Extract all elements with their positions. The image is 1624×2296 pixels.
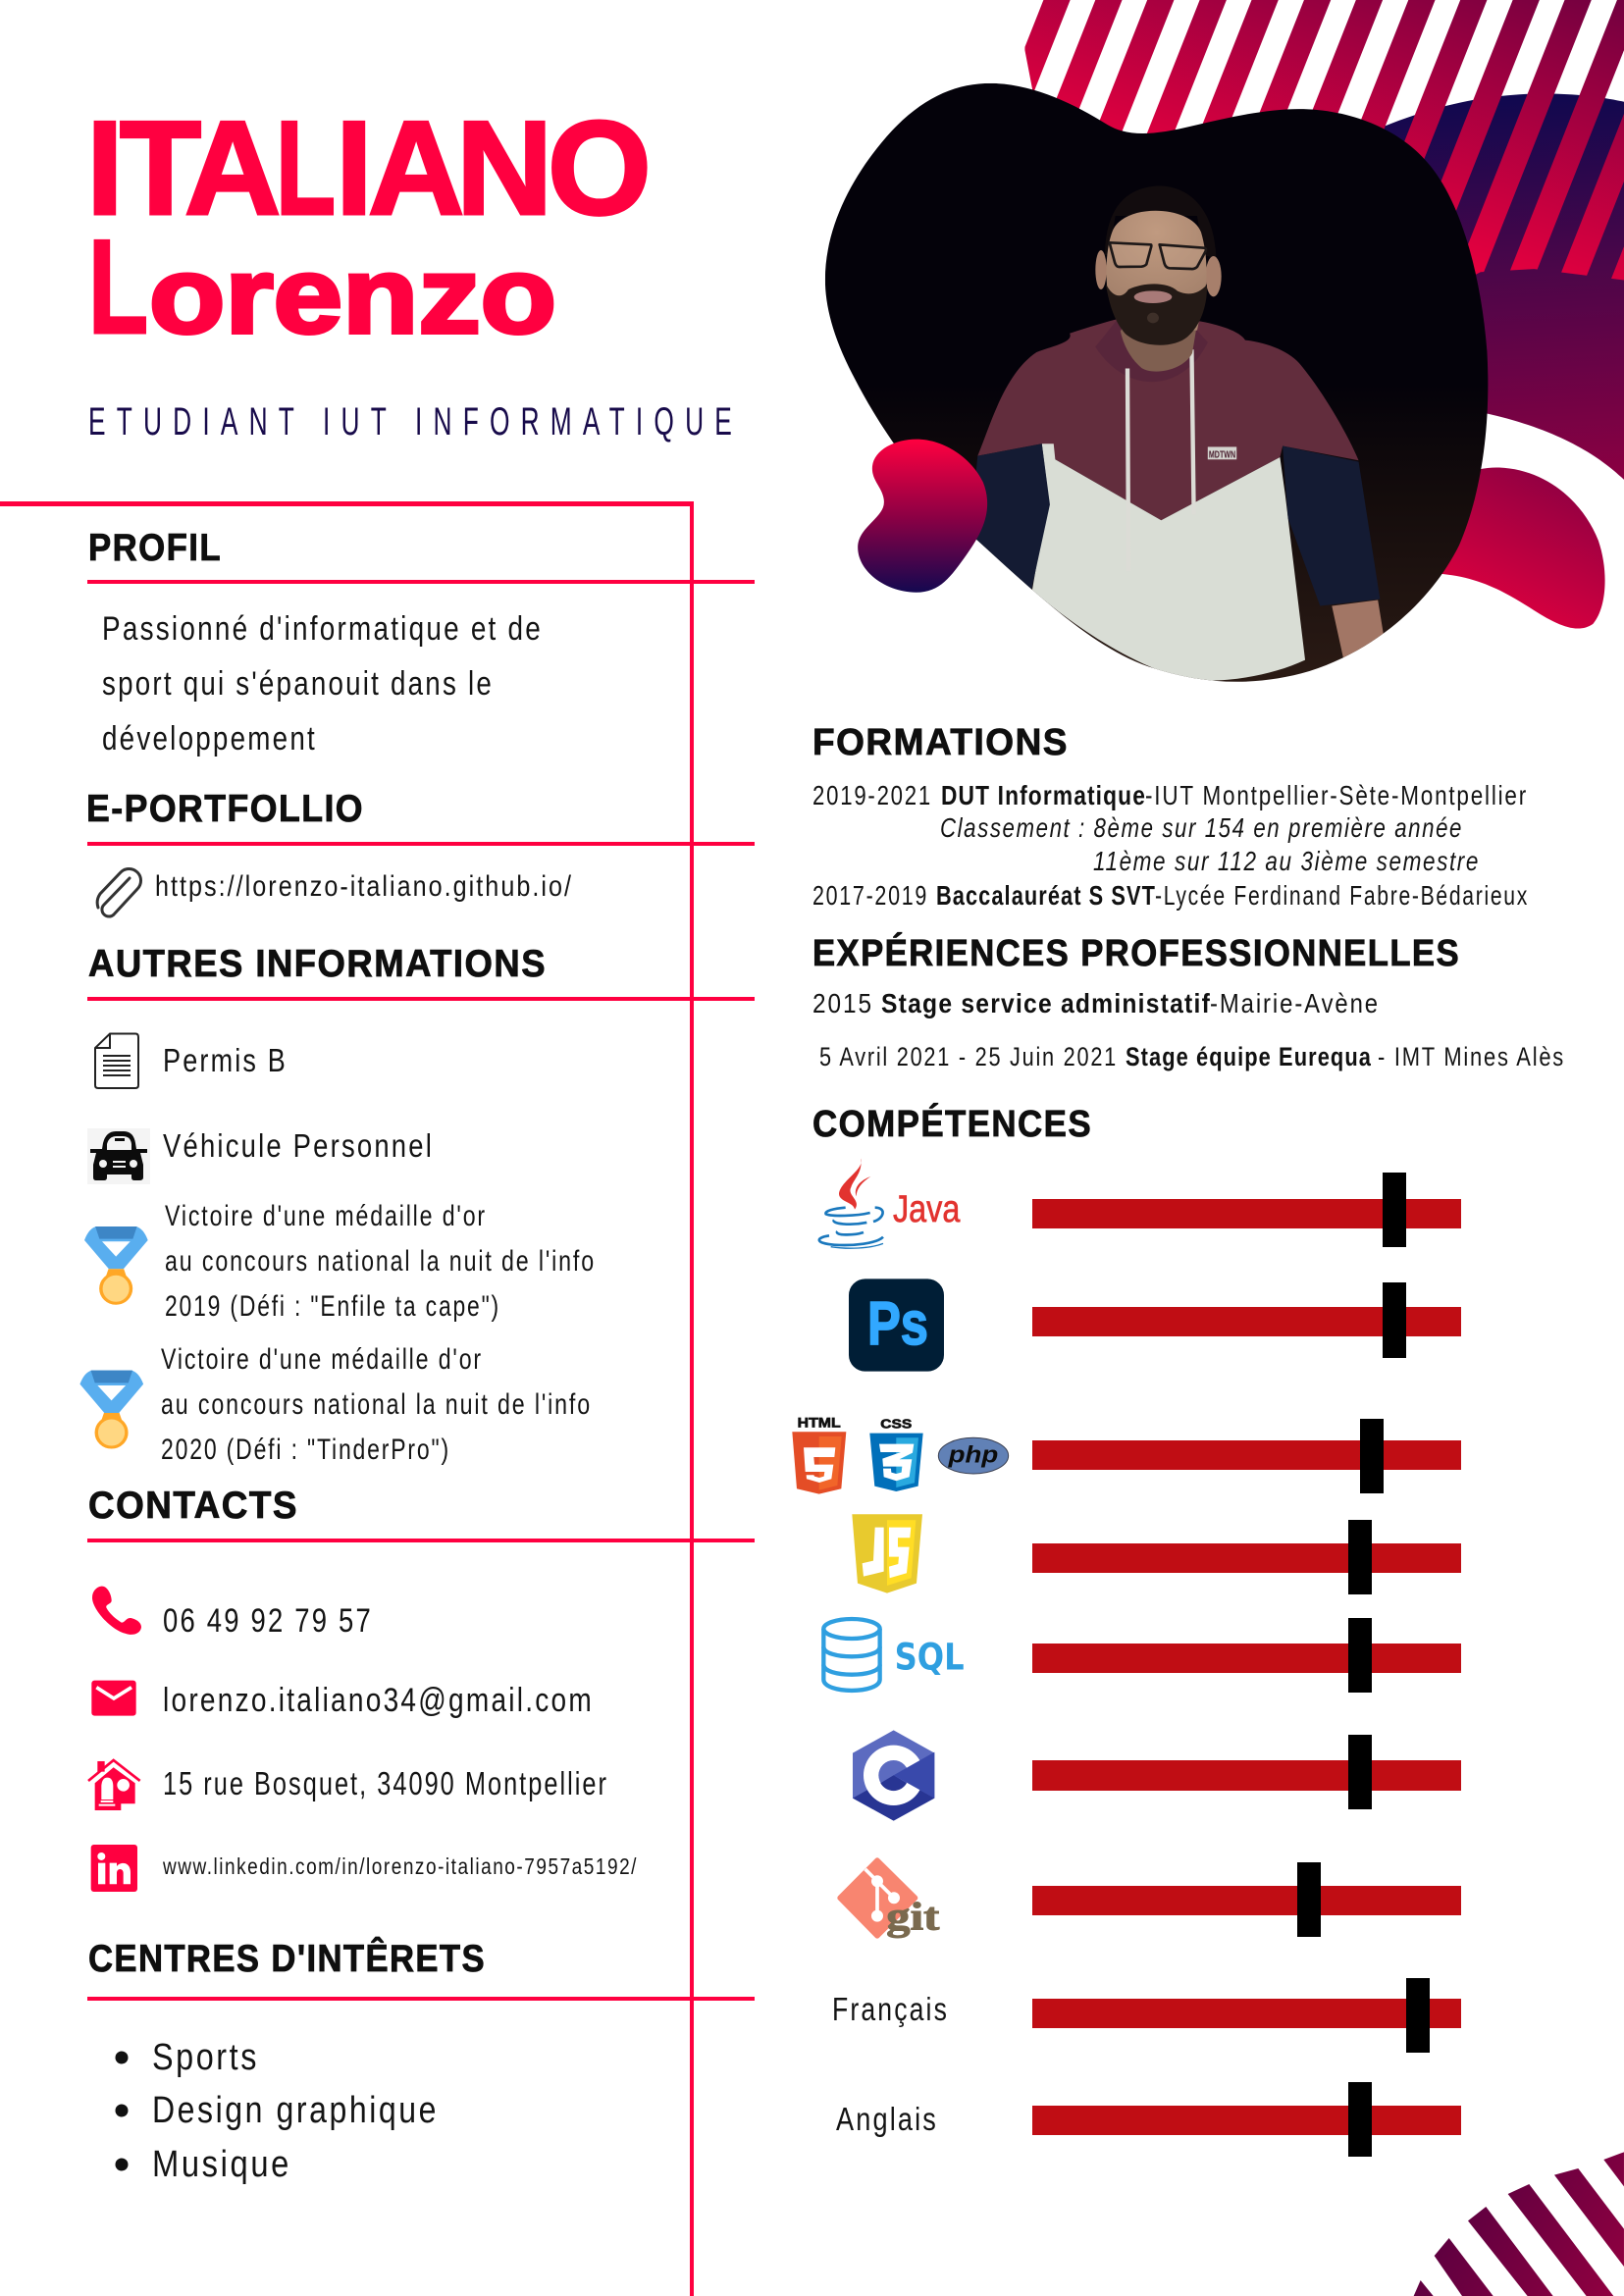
heading: centres d'interets: CENTRES D'INTÊRETS <box>88 1937 486 1980</box>
skill bar: git <box>1032 1862 1461 1937</box>
bullet list: Design graphique <box>152 2090 439 2131</box>
skill bar: anglais <box>1032 2082 1461 2157</box>
dark gradient blob <box>1374 93 1624 480</box>
icon: medal 2 <box>79 1371 143 1447</box>
panel: profil <box>88 527 543 757</box>
experience 2: Stage équipe Eurequa <box>1126 1042 1372 1071</box>
icon: git: git <box>886 1895 940 1939</box>
text: permis: Permis B <box>163 1042 288 1078</box>
hoodie logo: MDTWN <box>1209 449 1235 460</box>
portrait photo <box>817 77 1496 689</box>
icon: css3: CSS <box>880 1416 912 1431</box>
heading: contacts: CONTACTS <box>88 1485 298 1527</box>
title: name: L <box>276 93 336 242</box>
ranking lines: Classement : 8ème sur 154 en première année <box>940 812 1463 843</box>
panel: centres d'interets <box>88 1937 486 2185</box>
text: medal 2: Victoire d'une médaille d'or <box>161 1343 483 1376</box>
icon: sql <box>823 1619 965 1691</box>
sleeves <box>969 444 1050 591</box>
icon: java <box>819 1159 960 1248</box>
text: medal 1: au concours national la nuit de l'info <box>165 1245 596 1278</box>
experience 1: Stage service administatif <box>881 988 1211 1018</box>
link: https://lorenzo-italiano.github.io/ <box>155 870 573 903</box>
logos: lower group <box>823 1619 965 1939</box>
icon: php: php <box>947 1442 998 1469</box>
icon: car <box>87 1128 150 1184</box>
panel: competences <box>792 1102 1461 2157</box>
icon: c language <box>853 1730 934 1821</box>
text: address: 15 rue Bosquet, 34090 Montpellier <box>163 1765 608 1801</box>
glasses <box>1110 242 1206 269</box>
hoodie logo <box>1208 446 1236 460</box>
profile text <box>102 610 543 757</box>
heading: autres informations: AUTRES INFORMATIONS <box>88 943 547 985</box>
icon: linkedin <box>91 1845 137 1892</box>
icon: mail <box>91 1681 136 1716</box>
title: name <box>86 93 652 361</box>
ears <box>1095 250 1107 289</box>
icon: html5 <box>792 1415 846 1494</box>
icon: php <box>938 1437 1009 1474</box>
chin <box>1147 313 1159 323</box>
icon: phone <box>92 1587 141 1635</box>
heading: experiences: EXPÉRIENCES PROFESSIONNELLES <box>812 931 1460 974</box>
label: francais: Français <box>832 1991 949 2027</box>
skill bar: c <box>1032 1735 1461 1809</box>
bottom right stripes <box>1414 2152 1624 2296</box>
formation line 1 <box>812 780 1528 810</box>
heading: formations: FORMATIONS <box>812 722 1069 763</box>
bullet list: Musique <box>152 2144 291 2185</box>
ranking lines <box>940 812 1480 876</box>
profile text: sport qui s'épanouit dans le <box>102 665 494 703</box>
hoodie <box>977 319 1359 520</box>
text: medal 2: au concours national la nuit de l'info <box>161 1388 592 1421</box>
skill bar: java <box>1032 1173 1461 1247</box>
icon: house <box>88 1760 140 1810</box>
heading: e-portfolio: E-PORTFOLLIO <box>86 788 364 830</box>
text: medal 1: Victoire d'une médaille d'or <box>165 1200 487 1232</box>
icon: git <box>840 1860 940 1939</box>
formation line 2: Baccalauréat S SVT <box>936 880 1156 911</box>
small gradient blob <box>858 440 987 593</box>
label: anglais: Anglais <box>836 2101 938 2137</box>
title: name: orenzo <box>149 235 556 356</box>
face <box>1106 211 1207 331</box>
title: name: ITA <box>86 93 281 242</box>
icon: medal 1 <box>84 1226 148 1303</box>
experience 1: 2015 <box>812 988 873 1018</box>
title: name: L <box>88 212 148 361</box>
icon: sql: SQL <box>895 1635 965 1678</box>
profile text: développement <box>102 720 317 757</box>
experience 2: - IMT Mines Alès <box>1378 1042 1565 1071</box>
beard <box>1106 283 1207 345</box>
text: vehicule: Véhicule Personnel <box>163 1127 434 1164</box>
formation line 1: 2019-2021 <box>812 780 932 810</box>
logos: upper group <box>792 1159 1009 1593</box>
panel: formations <box>812 722 1529 911</box>
subtitle: ETUDIANT IUT INFORMATIQUE <box>88 400 743 444</box>
formation line 2 <box>812 880 1529 911</box>
skill bar: francais <box>1032 1978 1461 2053</box>
skill bar: sql <box>1032 1618 1461 1693</box>
icon: paperclip <box>97 868 141 916</box>
portrait head <box>1095 185 1222 372</box>
text: medal 2 <box>161 1343 592 1466</box>
hoodie strings <box>1125 349 1196 504</box>
icon: css3 <box>869 1416 923 1491</box>
text: medal 1 <box>165 1200 596 1323</box>
icon: javascript <box>852 1514 922 1593</box>
icon: document <box>95 1034 138 1088</box>
neck <box>1121 324 1197 372</box>
hair <box>1105 185 1216 258</box>
frame lines <box>0 501 755 2296</box>
crimson blob <box>1427 467 1605 629</box>
text: linkedin: www.linkedin.com/in/lorenzo-italiano-7957a5192/ <box>162 1853 638 1879</box>
formation line 1: -IUT Montpellier-Sète-Montpellier <box>1145 780 1528 810</box>
hoodie white front <box>1032 444 1305 681</box>
heading: competences: COMPÉTENCES <box>812 1102 1092 1145</box>
experience 2 <box>819 1042 1565 1071</box>
experience 1: -Mairie-Avène <box>1210 988 1380 1018</box>
decorative header artwork and photo <box>817 0 1624 689</box>
diagonal stripes <box>1024 0 1624 281</box>
skill bar: photoshop <box>1032 1282 1461 1358</box>
forearm <box>1332 600 1385 662</box>
icon: photoshop: Ps <box>867 1290 928 1358</box>
formation line 2: 2017-2019 <box>812 880 928 911</box>
text: medal 1: 2019 (Défi : "Enfile ta cape") <box>165 1290 500 1323</box>
title: name: IANO <box>336 93 652 242</box>
experience 1 <box>812 988 1380 1018</box>
panel: experiences <box>812 931 1565 1071</box>
experience 2: 5 Avril 2021 - 25 Juin 2021 <box>819 1042 1118 1071</box>
profile text: Passionné d'informatique et de <box>102 610 543 648</box>
icon: photoshop <box>849 1278 944 1372</box>
text: medal 2: 2020 (Défi : "TinderPro") <box>161 1434 450 1466</box>
heading: profil: PROFIL <box>88 527 222 569</box>
icon: java: Java <box>893 1187 960 1230</box>
panel: e-portfolio <box>86 788 573 916</box>
text: phone: 06 49 92 79 57 <box>163 1602 373 1640</box>
bullet list <box>116 2037 439 2185</box>
bullet list: Sports <box>152 2037 259 2078</box>
mouth <box>1134 290 1172 303</box>
panel: autres informations <box>79 943 596 1466</box>
icon: html5: HTML <box>798 1415 841 1431</box>
skill bar: html css php <box>1032 1419 1461 1493</box>
ranking lines: 11ème sur 112 au 3ième semestre <box>1093 846 1480 876</box>
panel: contacts <box>88 1485 638 1892</box>
text: mail: lorenzo.italiano34@gmail.com <box>163 1682 594 1719</box>
skill bar: javascript <box>1032 1520 1461 1594</box>
hood shadow <box>1095 319 1208 382</box>
formation line 1: DUT Informatique <box>941 780 1146 810</box>
